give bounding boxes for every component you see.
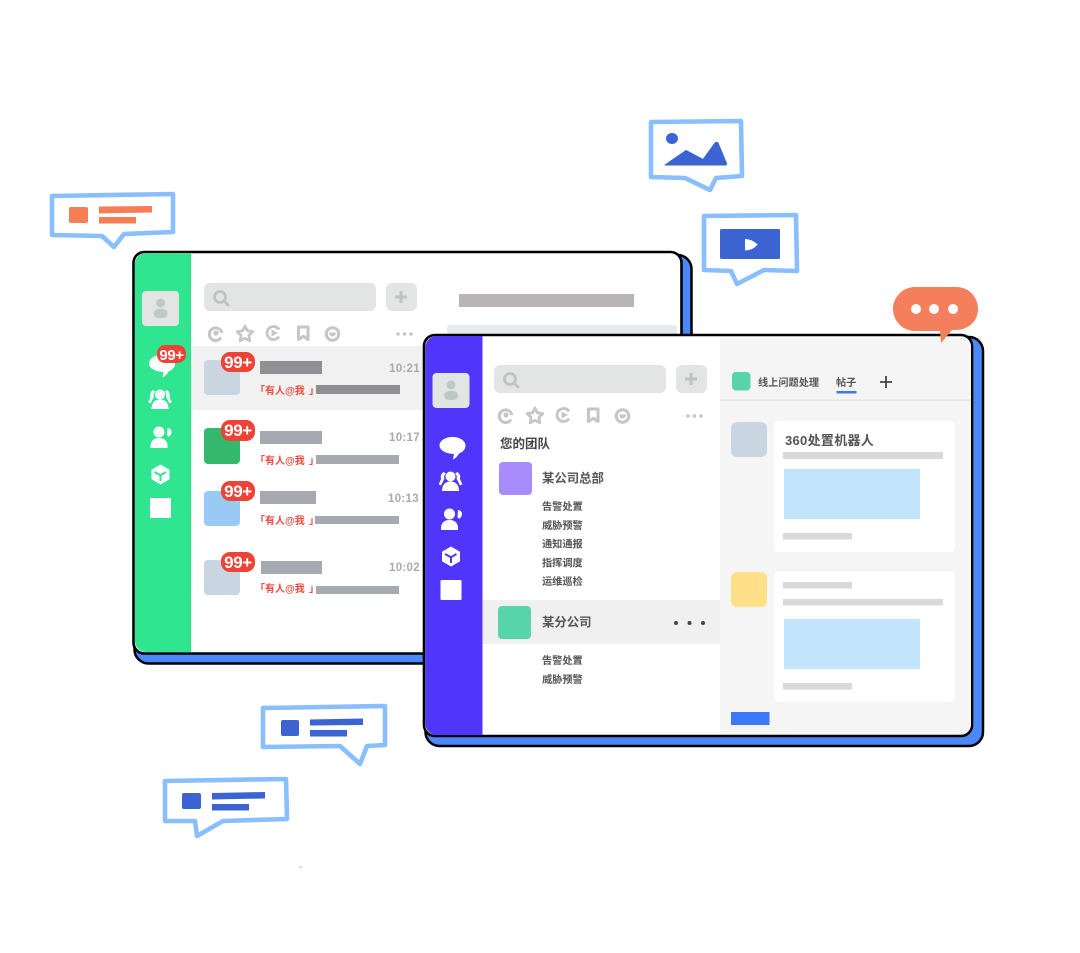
window body: [134, 252, 682, 654]
team: headquarters: 告警处置: [542, 500, 583, 513]
row highlight: [191, 346, 680, 410]
team: headquarters: 运维巡检: [542, 575, 583, 588]
message row 3: 「: [255, 514, 265, 527]
tab bar: [720, 372, 971, 401]
message row 4: [204, 552, 420, 595]
message row 3: 99+: [224, 482, 252, 501]
sidebar icons: [142, 291, 179, 518]
window body: [424, 335, 972, 736]
message row 3: 有人@我: [265, 514, 305, 527]
blue button: [731, 712, 770, 725]
callout: blue text bubble lower right: [263, 706, 385, 764]
header panel: [447, 325, 677, 337]
right pane background: [720, 336, 971, 734]
panel: back window: [134, 252, 692, 664]
team: headquarters: 某公司总部: [542, 470, 604, 486]
purple sidebar: [426, 336, 482, 735]
message row 1: 99+: [224, 353, 252, 372]
callout: image bubble: [651, 121, 742, 190]
header bar: [459, 294, 634, 307]
toolbar: [494, 365, 707, 423]
callout: orange text bubble top left: [52, 194, 173, 247]
message row 3: [204, 481, 419, 527]
toolbar: [204, 283, 417, 341]
panel: front window: [424, 335, 983, 746]
message row 2: 有人@我: [265, 454, 305, 467]
message row 1: 有人@我: [265, 384, 305, 397]
message row 4: 99+: [224, 553, 252, 572]
message row 4: 」: [309, 584, 319, 595]
window shadow: [426, 337, 983, 746]
team: branch: 某分公司: [542, 614, 592, 630]
team: branch: 告警处置: [542, 654, 583, 667]
team: headquarters: 指挥调度: [542, 556, 583, 570]
sidebar icons: [432, 373, 470, 600]
tab bar: 线上问题处理: [758, 376, 819, 389]
callout: video bubble: [704, 215, 797, 284]
sidebar badge: 99+: [159, 347, 184, 364]
window shadow: [134, 255, 692, 664]
tab bar: 帖子: [836, 376, 856, 389]
team: headquarters: 威胁预警: [542, 519, 583, 532]
message row 1: 「: [255, 384, 265, 397]
callout: orange chat bubble: [893, 287, 978, 343]
team: headquarters: [499, 462, 604, 588]
message row 1: 10:21: [389, 363, 420, 375]
message row 1: [204, 352, 420, 397]
message row 2: 99+: [224, 421, 252, 440]
message row 4: 有人@我: [265, 582, 305, 595]
team heading: 您的团队: [500, 436, 551, 451]
message row 4: 「: [255, 582, 265, 595]
green sidebar: [135, 253, 191, 652]
post card 1: 360处置机器人: [785, 433, 874, 448]
team: branch: 威胁预警: [542, 673, 583, 686]
message row 1: 」: [309, 386, 319, 397]
speck: [299, 866, 302, 868]
message row 2: 「: [255, 454, 265, 467]
team: branch: [483, 600, 720, 686]
message row 4: 10:02: [389, 562, 420, 574]
team: headquarters: 通知通报: [542, 538, 583, 550]
message row 2: [204, 420, 420, 467]
message row 2: 」: [309, 456, 319, 467]
post card 1: [731, 421, 955, 552]
message row 2: 10:17: [389, 432, 420, 444]
callout: blue text bubble lower left: [165, 779, 287, 836]
post card 2: [731, 571, 955, 702]
message row 3: 」: [309, 516, 319, 527]
message row 3: 10:13: [388, 493, 419, 505]
